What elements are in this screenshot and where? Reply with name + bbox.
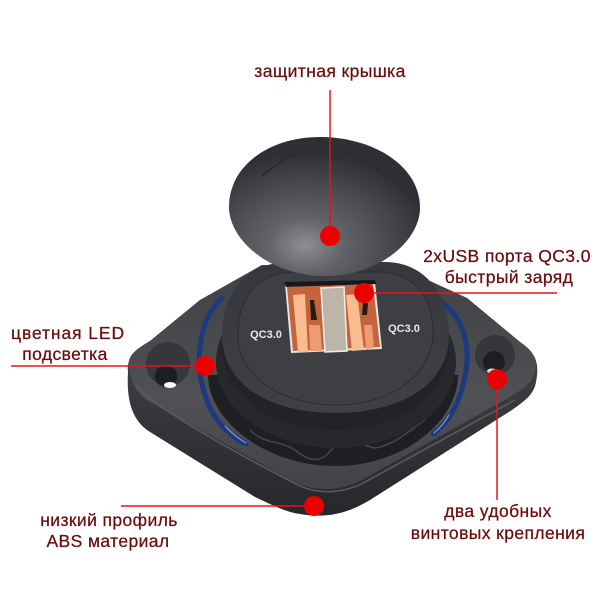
round top disc (222, 262, 449, 430)
text: screws label: два удобных (444, 501, 552, 521)
label QC3.0 left: QC3.0 (250, 329, 282, 341)
mounting hole right (475, 335, 515, 375)
protective cap (229, 137, 420, 276)
label QC3.0 right: QC3.0 (388, 323, 420, 335)
mounting hole left (146, 342, 190, 388)
callout: protective cover (254, 61, 406, 246)
callout: USB ports (354, 246, 591, 303)
callout: mounting screws (411, 369, 585, 543)
blue LED arc left (199, 298, 246, 444)
callout: low profile (40, 496, 324, 551)
text: USB label: быстрый заряд (445, 267, 573, 287)
cylinder (216, 276, 456, 448)
blue LED arc right (433, 304, 467, 434)
base flange (128, 265, 537, 516)
text: material label: ABS материал (46, 531, 170, 551)
product: USB socket (128, 137, 537, 516)
text: USB label: 2xUSB порта QC3.0 (423, 246, 591, 266)
text: screws label: винтовых крепления (411, 523, 585, 543)
USB port (284, 280, 382, 353)
callout: LED backlight (11, 323, 215, 376)
text: LED label: цветная LED (11, 323, 125, 343)
heading: cover label: защитная крышка (254, 61, 406, 81)
text: material label: низкий профиль (40, 510, 178, 530)
wavy collar (208, 375, 458, 466)
text: LED label: подсветка (22, 344, 108, 364)
